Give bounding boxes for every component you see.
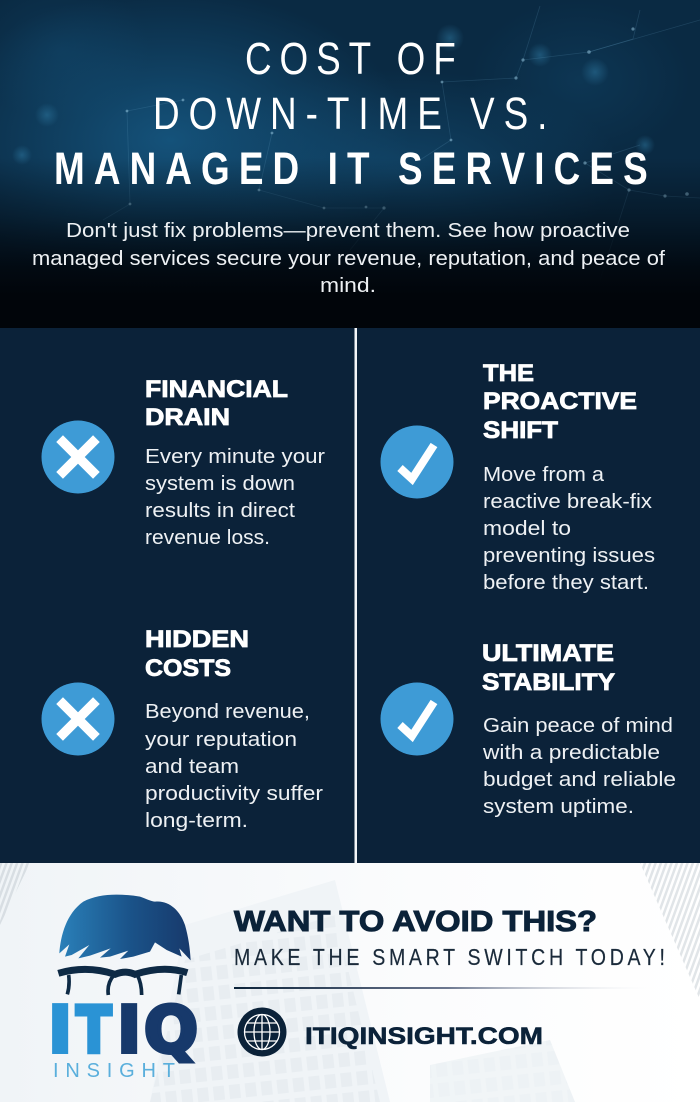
panel: header background — [0, 0, 700, 328]
card: financial drain: results in direct — [145, 499, 295, 522]
logo wordmark: I — [117, 994, 141, 1068]
card: hidden costs: Beyond revenue, — [145, 700, 310, 723]
card: financial drain: FINANCIAL — [145, 376, 288, 403]
intro text: Don't just fix problems—prevent them. See how proactive — [66, 219, 630, 242]
divider rule — [234, 987, 662, 989]
card: hidden costs: HIDDEN — [145, 626, 249, 653]
card: ultimate stability: system uptime. — [483, 795, 634, 818]
card: the proactive shift: Move from a — [483, 463, 605, 486]
title: MANAGED IT SERVICES — [54, 144, 648, 194]
icon: glasses — [58, 969, 187, 995]
icon: x circle financial drain — [42, 420, 114, 494]
title — [54, 34, 648, 194]
card: hidden costs: your reputation — [145, 728, 297, 751]
logo wordmark: I — [48, 994, 72, 1068]
intro text: mind. — [320, 274, 376, 297]
call to action heading: WANT TO AVOID THIS? — [234, 906, 597, 938]
panel: comparison background — [0, 328, 700, 863]
card: hidden costs: long-term. — [145, 809, 248, 832]
card: financial drain: Every minute your — [145, 445, 325, 468]
icon: check circle ultimate stability — [380, 682, 454, 756]
title: COST OF — [245, 34, 456, 84]
card: the proactive shift: preventing issues — [483, 544, 655, 567]
icon: x circle hidden costs — [42, 682, 114, 756]
card: the proactive shift: PROACTIVE — [483, 388, 637, 415]
card: financial drain: revenue loss. — [145, 526, 270, 549]
icon: globe — [238, 1008, 286, 1056]
logo wordmark — [48, 994, 198, 1068]
card: the proactive shift: reactive break-fix — [483, 490, 653, 513]
icon: check circle proactive shift — [380, 426, 454, 498]
logo wordmark: Q — [144, 994, 198, 1068]
card: ultimate stability — [482, 640, 676, 818]
logo wordmark: T — [76, 994, 112, 1068]
card: hidden costs: productivity suffer — [145, 782, 323, 805]
card: ultimate stability: budget and reliable — [483, 768, 676, 791]
card: ultimate stability: STABILITY — [482, 669, 615, 696]
card: hidden costs: COSTS — [145, 655, 231, 682]
icon: hair — [59, 895, 191, 960]
card: financial drain — [145, 376, 325, 549]
card: ultimate stability: ULTIMATE — [482, 640, 614, 667]
card: ultimate stability: Gain peace of mind — [483, 714, 673, 737]
logo — [48, 895, 198, 1082]
title: DOWN-TIME VS. — [153, 89, 547, 139]
intro text — [32, 219, 665, 297]
card: financial drain: DRAIN — [145, 404, 230, 431]
card: the proactive shift: SHIFT — [483, 417, 558, 444]
card: the proactive shift — [483, 360, 655, 594]
card: ultimate stability: with a predictable — [482, 741, 660, 764]
card: the proactive shift: before they start. — [483, 571, 649, 594]
card: financial drain: system is down — [145, 472, 295, 495]
intro text: managed services secure your revenue, reputation, and peace of — [32, 247, 665, 270]
panel: footer background — [0, 863, 700, 1102]
website url: ITIQINSIGHT.COM — [305, 1023, 543, 1050]
card: hidden costs — [145, 626, 323, 832]
call to action subheading: MAKE THE SMART SWITCH TODAY! — [234, 945, 665, 970]
card: the proactive shift: THE — [483, 360, 534, 387]
card: hidden costs: and team — [145, 755, 239, 778]
card: the proactive shift: model to — [483, 517, 571, 540]
logo tagline: INSIGHT — [53, 1060, 175, 1082]
